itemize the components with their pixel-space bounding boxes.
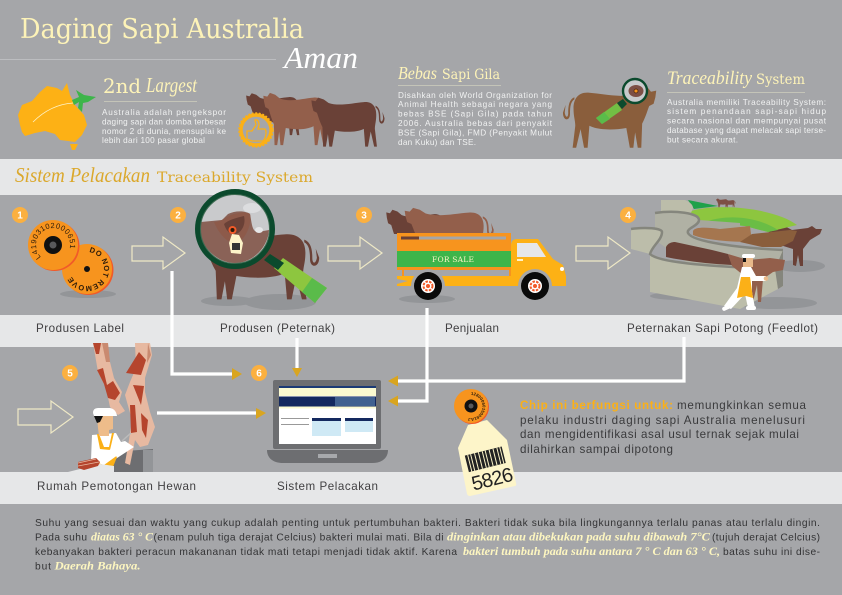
panel: 2nd largest xyxy=(18,73,226,150)
illustration: three cows with thumb badge xyxy=(239,93,385,147)
step 1: ear tags: L41903102000651 xyxy=(31,222,76,260)
labels row 1: Produsen Label xyxy=(36,322,124,335)
text: bottom paragraph: bakteri tumbuh pada suhu antara 7 ° C dan 63 ° C, xyxy=(463,546,720,558)
badge 3: 3 xyxy=(361,211,367,222)
heading: Aman: Aman xyxy=(282,40,358,75)
text: Traceability description xyxy=(667,98,827,144)
heading: Sistem Pelacakan Traceability System: Traceability System xyxy=(157,170,313,186)
text: chip description: dan mengidentifikasi asal usul ternak sejak mulai xyxy=(520,428,799,441)
heading: 2nd Largest: Largest xyxy=(145,73,198,97)
text: bottom paragraph: kebanyakan bakteri peracun makananan tidak mati tetapi menjadi tidak aktif. Karena xyxy=(35,547,457,558)
panel: Bebas Sapi Gila xyxy=(398,63,553,147)
figure: farmer xyxy=(722,254,768,312)
illustration: cow with magnifier xyxy=(563,79,656,148)
badge 2 xyxy=(170,207,186,223)
text: bottom paragraph: (tujuh derajat Celcius) xyxy=(712,532,820,544)
meat left xyxy=(93,343,125,415)
step 6: laptop xyxy=(251,365,388,463)
text: Bebas description: Disahkan oleh World Organization for xyxy=(398,91,552,100)
text: Traceability description: Australia memiliki Traceability System: xyxy=(667,98,826,107)
middle wall xyxy=(655,212,783,287)
text: bottom paragraph: Suhu yang sesuai dan waktu yang cukup adalah penting untuk pertumbuhan bakteri. Bakteri tidak suka bila lingkungannya terlalu panas atau terlalu dingin. xyxy=(35,518,820,529)
text: 2nd largest description xyxy=(102,108,226,145)
text: Traceability description: database yang dapat melacak sapi terse- xyxy=(667,126,826,135)
heading: Traceability System: Traceability xyxy=(667,68,753,89)
text: FOR SALE: FOR SALE xyxy=(432,255,474,264)
far wall xyxy=(661,200,693,213)
icon: thumb up badge xyxy=(239,113,273,147)
heading: Bebas Sapi Gila: Bebas xyxy=(398,63,437,83)
front cows xyxy=(666,242,732,265)
heading: Sistem Pelacakan Traceability System: Sistem Pelacakan xyxy=(15,163,150,187)
text: Traceability description: sistem penandaan sapi-sapi hidup xyxy=(667,107,826,116)
step 5: slaughterhouse xyxy=(18,343,155,472)
badge 2: 2 xyxy=(175,211,181,222)
connector lines xyxy=(157,271,684,413)
arrow: step 1 to 2 xyxy=(132,237,185,269)
heading: 2nd Largest: 2nd xyxy=(103,74,141,98)
labels row 2: Sistem Pelacakan xyxy=(277,480,378,493)
badge 4 xyxy=(620,207,636,223)
text: 2nd largest description: lebih dari 100 pasar global xyxy=(102,136,205,145)
text: Bebas description: bebas BSE (Sapi Gila) pada tahun xyxy=(398,110,552,118)
icon: ear tag 5826: 12800060150081AJ xyxy=(468,392,486,421)
meat right xyxy=(125,343,155,465)
arrowheads xyxy=(232,368,398,419)
text: bottom paragraph: diatas 63 ° C xyxy=(91,532,153,544)
butcher xyxy=(91,408,134,472)
grass xyxy=(688,200,718,209)
badge 5: 5 xyxy=(67,369,73,380)
badge 4: 4 xyxy=(625,211,631,222)
text: Bebas description: 2006. Australia bebas dari penyakit xyxy=(398,119,553,128)
step 4: feedlot xyxy=(620,198,825,312)
front wall xyxy=(631,228,778,309)
badge 6: 6 xyxy=(256,369,262,380)
text: Traceability description: secara nasional dan mempunyai pusat xyxy=(667,116,827,126)
title: Daging Sapi Australia xyxy=(20,14,304,45)
middle cows xyxy=(693,226,752,242)
step 2: cow under magnifier xyxy=(170,192,327,310)
heading: Sistem Pelacakan Traceability System xyxy=(15,163,313,187)
text: Bebas description: Animal Health sebagai negara yang xyxy=(398,100,552,109)
heading: Bebas Sapi Gila xyxy=(398,63,501,86)
labels row 1: Peternakan Sapi Potong (Feedlot) xyxy=(627,322,818,335)
text: bottom paragraph: but xyxy=(35,562,51,572)
labels row 1: Produsen (Peternak) xyxy=(220,322,335,335)
text: chip description: memungkinkan semua xyxy=(677,399,807,412)
arrow: step 2 to 3 xyxy=(328,237,382,269)
badge 3 xyxy=(356,207,372,223)
text: bottom paragraph xyxy=(35,518,820,572)
icon: ear tag 5826 xyxy=(454,389,516,496)
text: 2nd largest description: daging sapi dan domba terbesar xyxy=(102,118,226,126)
text: Traceability description: but secara akurat. xyxy=(667,136,738,144)
text: bottom paragraph: dinginkan atau dibekukan pada suhu dibawah 7°C xyxy=(447,532,710,544)
heading: Traceability System: System xyxy=(756,72,805,88)
badge 1: 1 xyxy=(17,211,23,222)
arrow: into step 5 xyxy=(18,401,73,433)
text: bottom paragraph: Daerah Bahaya. xyxy=(53,560,140,572)
heading: Bebas Sapi Gila: Sapi Gila xyxy=(442,67,500,83)
table with meat xyxy=(68,458,114,472)
text: Bebas description: dan Kuku) dan TSE. xyxy=(398,138,476,147)
text: bottom paragraph: Pada suhu xyxy=(35,532,87,544)
heading: 2nd Largest xyxy=(103,73,198,102)
text: 2nd largest description: nomor 2 di dunia, mensuplai ke xyxy=(102,127,226,136)
text: chip description: pelaku industri daging sapi Australia menelusuri xyxy=(520,414,805,427)
labels row 1: Penjualan xyxy=(445,322,499,335)
heading: Traceability System xyxy=(667,68,805,93)
text: chip description: Chip ini berfungsi untuk: xyxy=(520,399,673,412)
labels row 1 xyxy=(36,322,818,335)
text: 5826: 5826 xyxy=(469,464,515,495)
text: chip description xyxy=(520,399,807,456)
far cow xyxy=(765,224,822,266)
text: bottom paragraph: (enam puluh tiga derajat Celcius) bakteri mulai mati. Bila di xyxy=(154,532,444,544)
icon: Australia map with plane xyxy=(18,83,96,150)
text: Bebas description xyxy=(398,91,553,147)
step 1: ear tags xyxy=(12,207,116,298)
text: 2nd largest description: Australia adalah pengekspor xyxy=(102,108,226,117)
butcher block xyxy=(112,449,153,472)
labels row 2 xyxy=(37,480,378,493)
arrow: step 3 to 4 xyxy=(576,237,630,269)
text: chip description: dilahirkan sampai dipotong xyxy=(520,443,673,456)
labels row 2: Rumah Pemotongan Hewan xyxy=(37,480,196,493)
step 3: truck with cattle xyxy=(356,207,566,303)
panel: Traceability System xyxy=(667,68,827,144)
text: bottom paragraph: batas suhu ini dise- xyxy=(723,547,820,558)
step 1: ear tags: DO NOT REMOVE xyxy=(68,247,110,292)
text: Bebas description: BSE (Sapi Gila), FMD (Penyakit Mulut xyxy=(398,128,553,138)
